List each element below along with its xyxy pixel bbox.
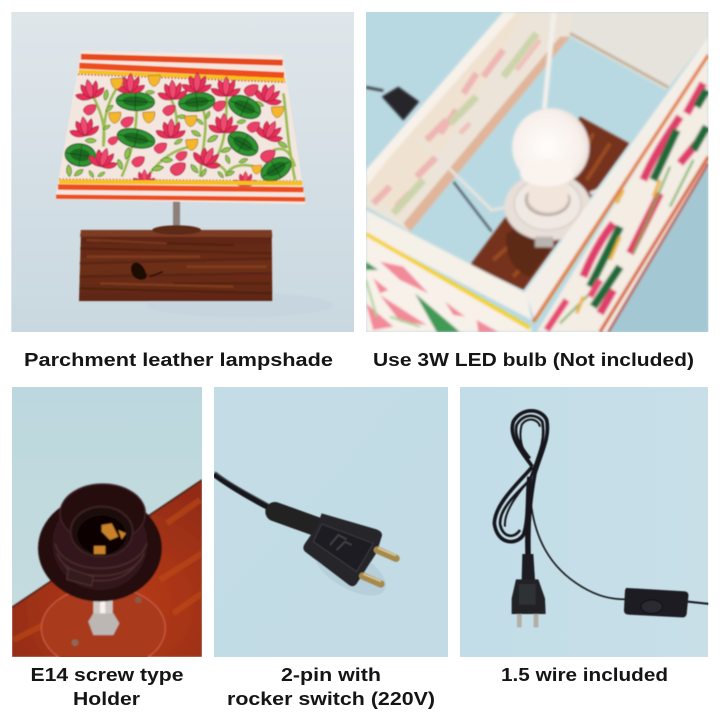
back inner panel xyxy=(570,12,708,90)
plug xyxy=(512,554,546,627)
panel: 1.5 wire photo xyxy=(460,387,710,657)
lampshade front panel xyxy=(366,233,532,332)
caption: 2-pin with rocker switch: rocker switch (220V) xyxy=(227,689,435,709)
bulb support rods xyxy=(417,12,603,210)
metal stem xyxy=(88,600,119,635)
caption: E14 screw type Holder: Holder xyxy=(73,689,140,709)
wooden base seen from above xyxy=(470,117,629,290)
brass pins xyxy=(363,548,396,584)
lamp stem xyxy=(173,200,180,227)
lotus flowers xyxy=(68,73,288,186)
caption: 2-pin with rocker switch xyxy=(227,665,435,709)
lampshade right outer panel xyxy=(537,50,708,332)
black cord inside xyxy=(453,182,492,232)
panel: E14 screw type holder photo xyxy=(12,387,202,670)
bulb holder xyxy=(504,173,591,247)
panel: 2-pin plug photo xyxy=(214,387,448,657)
cable right of switch xyxy=(688,602,710,604)
thin cable to switch xyxy=(531,503,626,599)
small leaves xyxy=(66,89,288,179)
stems xyxy=(93,88,295,180)
LED bulb xyxy=(512,108,589,212)
top border stripes xyxy=(78,57,285,82)
right white rim xyxy=(525,37,708,320)
shadow beneath plug xyxy=(315,559,386,596)
big lily pads xyxy=(63,91,295,186)
front white rim xyxy=(366,210,532,320)
panel: open lampshade with LED bulb photo xyxy=(366,12,708,332)
plug body xyxy=(303,513,382,586)
wooden block base xyxy=(79,230,272,301)
black cord and adapter xyxy=(366,87,419,121)
caption: Parchment leather lampshade: Parchment leather lampshade xyxy=(24,350,333,370)
rocker switch xyxy=(624,588,688,617)
black cable xyxy=(214,474,275,511)
yellow buds xyxy=(109,75,284,174)
wooden base xyxy=(12,480,202,670)
caption: Use 3W LED bulb: Use 3W LED bulb (Not included) xyxy=(373,350,694,370)
background outside right xyxy=(608,160,708,332)
bottom border stripes xyxy=(56,179,305,199)
plug grommet xyxy=(275,512,317,527)
coiled cable xyxy=(494,411,547,557)
left inner panel xyxy=(366,12,573,232)
panel: parchment leather lampshade photo xyxy=(11,12,354,332)
bulb socket xyxy=(38,484,162,602)
caption: E14 screw type Holder: E14 screw type xyxy=(30,665,184,685)
caption: 1.5 wire included: 1.5 wire included xyxy=(501,665,668,685)
lampshade with lotus pattern xyxy=(55,51,306,204)
caption: 2-pin with rocker switch: 2-pin with xyxy=(281,665,381,685)
pink buds xyxy=(83,85,275,175)
brass contacts xyxy=(94,523,126,554)
base disc xyxy=(152,225,201,235)
caption: E14 screw type Holder xyxy=(30,665,184,709)
